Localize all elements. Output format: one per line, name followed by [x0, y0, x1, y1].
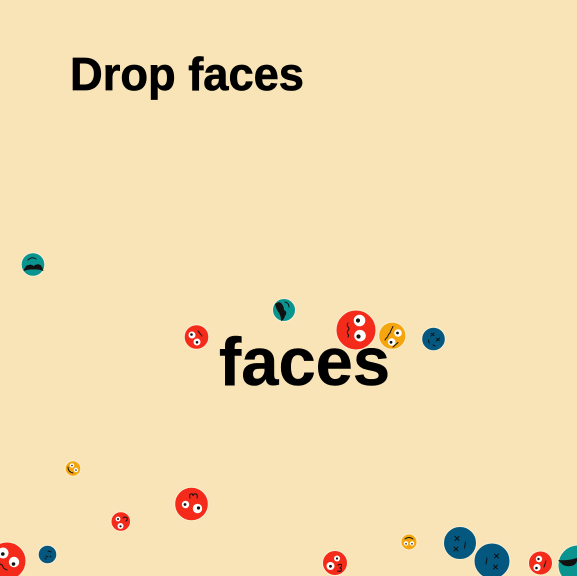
face: orange smiling	[65, 461, 81, 476]
face: blue crossed eyes, lower	[474, 543, 510, 576]
face: red, bottom right	[528, 551, 552, 575]
title: Drop faces	[70, 48, 304, 100]
face: teal with sunglasses	[558, 545, 577, 576]
falling word: faces: faces	[219, 325, 390, 400]
face: orange upside-down smile	[401, 534, 417, 550]
face: teal moustache	[21, 253, 45, 276]
face: red, lower left	[111, 512, 131, 531]
face: red, bottom left corner	[0, 542, 26, 576]
face: blue crossed eyes, centre right	[422, 327, 445, 351]
face: red small, centre left	[184, 325, 209, 349]
face: orange worried	[379, 322, 406, 349]
face: red kissing, bottom centre	[322, 550, 348, 576]
face: red large, centre	[336, 310, 376, 350]
face: blue crossed eyes, upper	[444, 526, 476, 560]
face: teal profile	[272, 298, 296, 322]
face: red, lower centre	[175, 487, 208, 521]
face: blue small, bottom left	[38, 545, 57, 564]
